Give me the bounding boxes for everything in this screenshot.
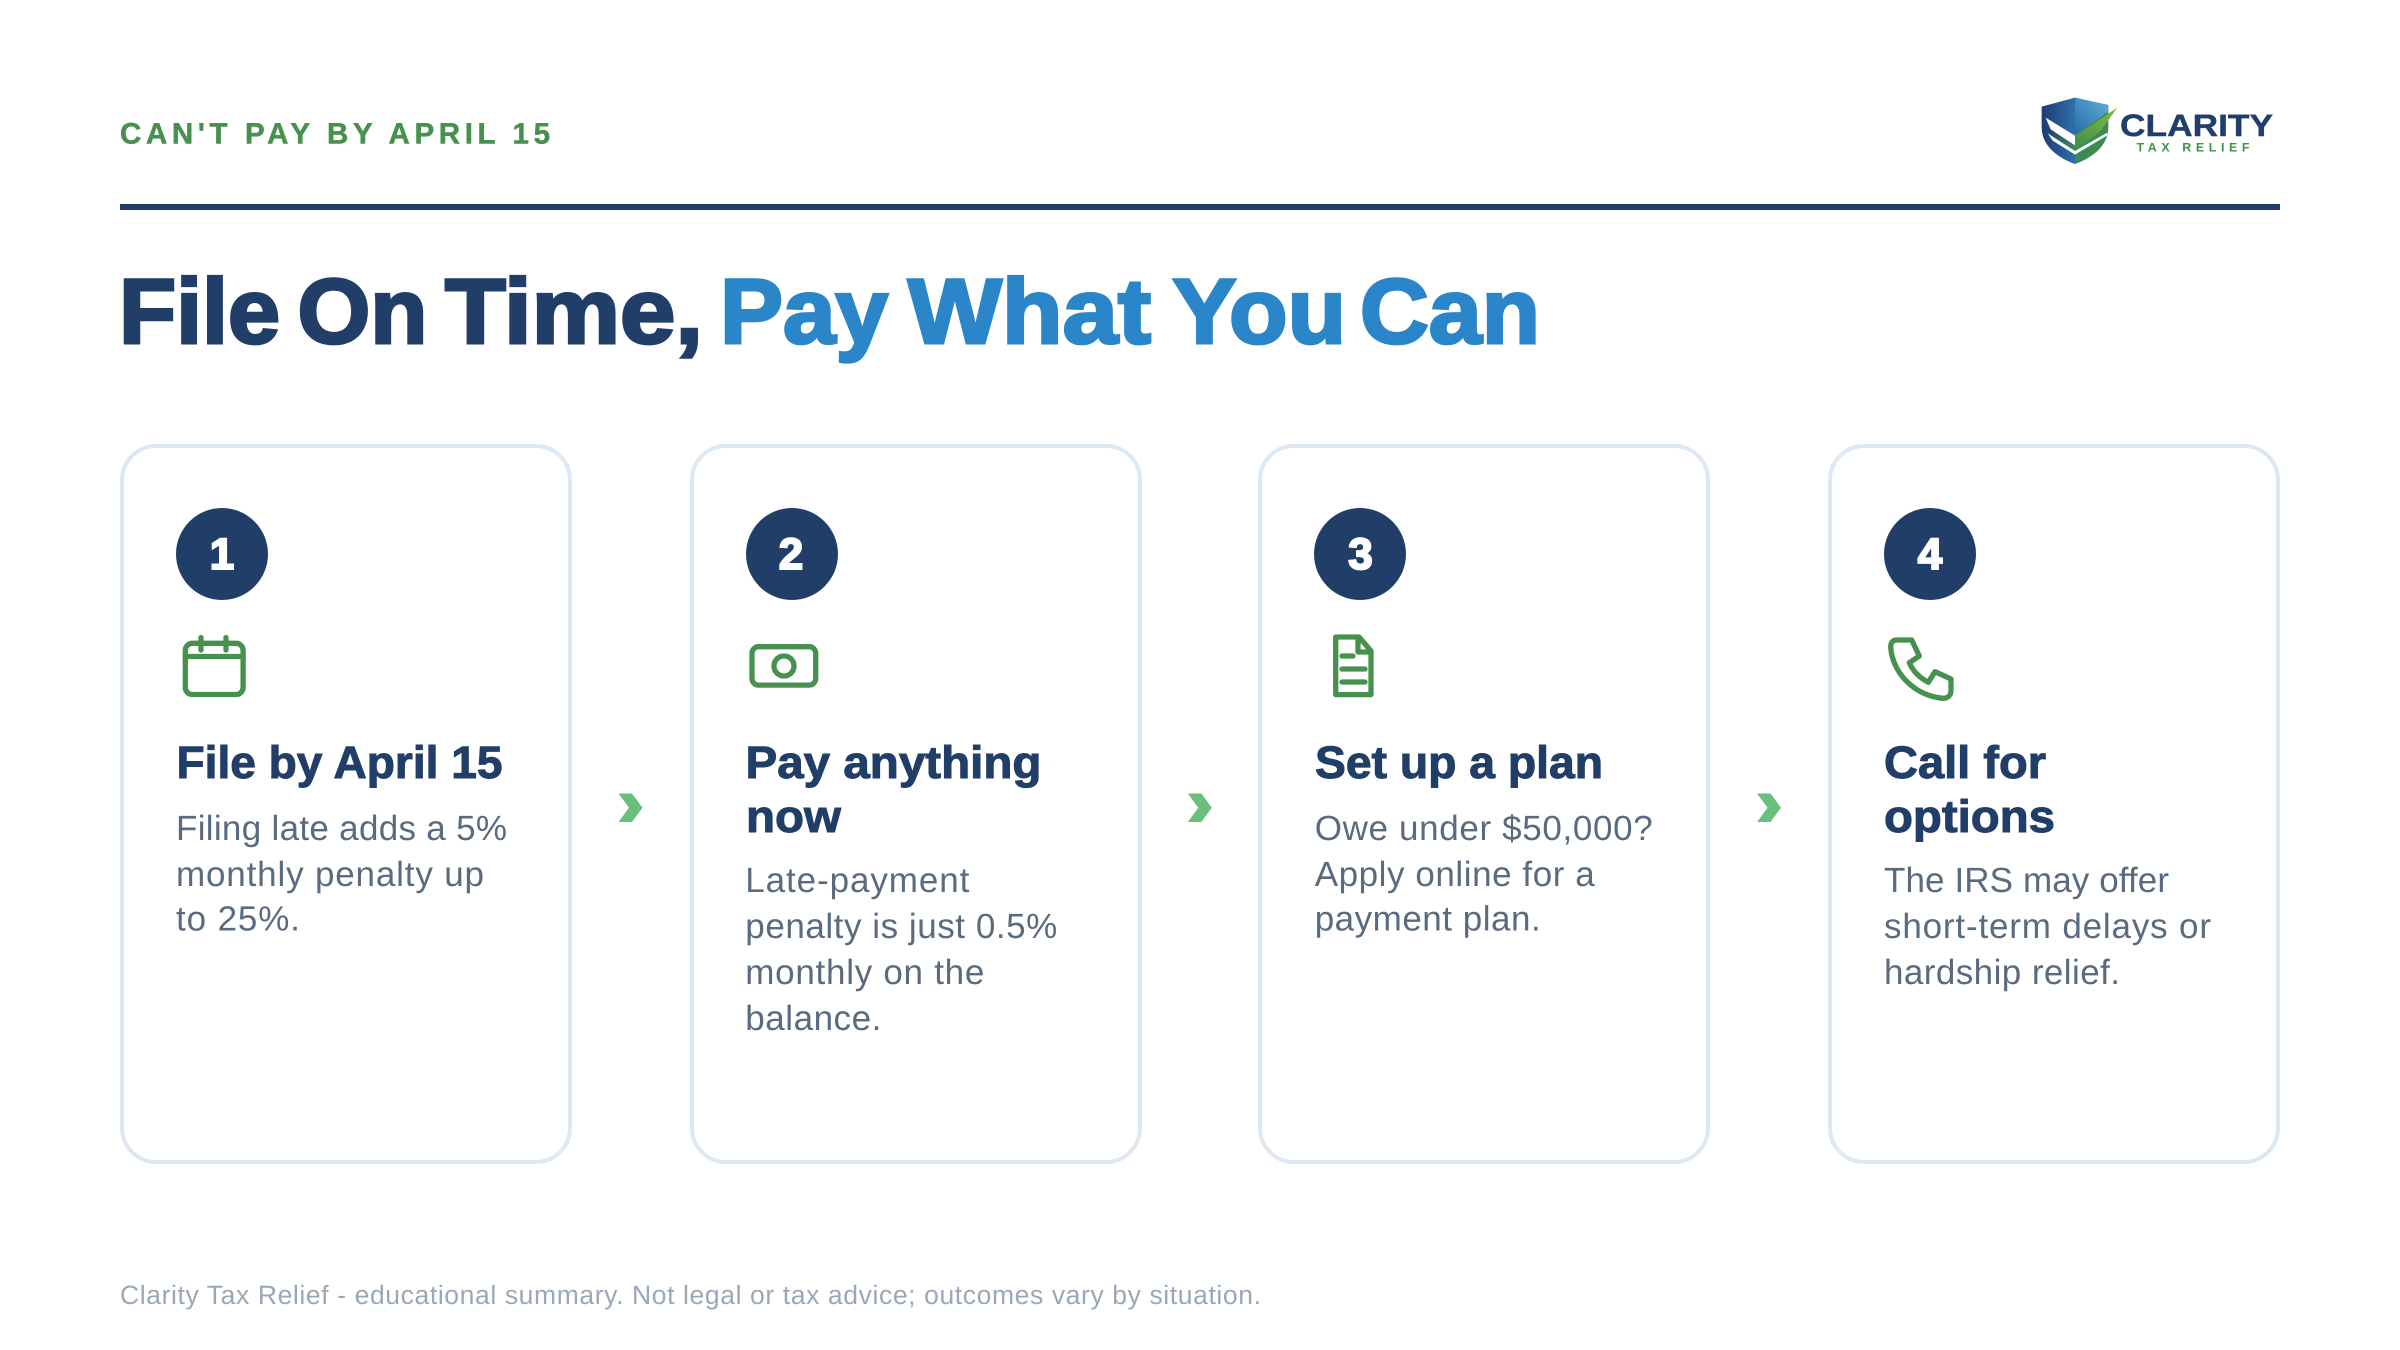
body text: Late-payment — [745, 861, 970, 900]
step number 3 — [1314, 508, 1406, 600]
icon: document — [1336, 637, 1371, 695]
card frame — [1260, 446, 1708, 1162]
logo: Clarity Tax Relief — [2042, 98, 2273, 164]
title: navy part: On — [298, 261, 428, 363]
body text: penalty is just 0.5% — [745, 907, 1057, 946]
heading: Set up a plan — [1315, 737, 1603, 788]
body text: to 25%. — [176, 900, 300, 938]
title: blue part: You — [1172, 261, 1346, 363]
card frame — [122, 446, 570, 1162]
icon: calendar — [185, 638, 243, 694]
title: navy part — [119, 261, 703, 363]
panel: step 4 — [1830, 446, 2278, 1162]
arrow 1 — [618, 794, 642, 822]
panel: step 1 — [122, 446, 570, 1162]
title — [119, 261, 1540, 363]
body text: balance. — [745, 999, 881, 1038]
step number 2: 2 — [779, 530, 803, 579]
panel: step 2 — [692, 446, 1140, 1162]
icon: banknote — [752, 647, 816, 685]
body text: payment plan. — [1315, 900, 1541, 938]
body text — [176, 809, 507, 938]
title: navy part: Time, — [445, 261, 703, 363]
step number 3: 3 — [1348, 530, 1373, 579]
title: blue part: Pay — [720, 261, 888, 363]
step number 2 — [746, 508, 838, 600]
body text — [1884, 861, 2211, 992]
body text: Apply online for a — [1315, 855, 1595, 894]
card frame — [1830, 446, 2278, 1162]
body text: Owe under $50,000? — [1315, 809, 1653, 848]
title: blue part: What — [908, 261, 1151, 363]
title: blue part — [720, 261, 1540, 363]
card frame — [692, 446, 1140, 1162]
panel: step 3 — [1260, 446, 1708, 1162]
body text: The IRS may offer — [1884, 861, 2169, 900]
step number 1 — [176, 508, 268, 600]
body text: hardship relief. — [1884, 953, 2120, 992]
icon: shield with check — [2042, 98, 2117, 164]
body text: monthly on the — [745, 953, 984, 992]
body text: Filing late adds a 5% — [176, 809, 507, 848]
heading: Pay anything — [746, 737, 1042, 788]
heading: Call for — [1884, 737, 2046, 788]
title: blue part: Can — [1360, 261, 1540, 363]
step number 4 — [1884, 508, 1976, 600]
heading — [1884, 737, 2055, 842]
arrow 2 — [1188, 794, 1212, 822]
logo wordmark: CLARITY — [2120, 108, 2273, 143]
icon: phone — [1891, 640, 1951, 698]
heading: options — [1884, 791, 2055, 842]
body text: monthly penalty up — [176, 855, 484, 894]
logo tagline: TAX RELIEF — [2136, 141, 2250, 155]
body text: short-term delays or — [1884, 907, 2211, 946]
header rule — [120, 204, 2280, 210]
eyebrow label: CAN'T PAY BY APRIL 15 — [120, 118, 550, 150]
step number 1: 1 — [210, 530, 234, 579]
heading: now — [746, 791, 842, 842]
step number 4: 4 — [1918, 530, 1943, 579]
footer disclaimer: Clarity Tax Relief - educational summary. Not legal or tax advice; outcomes vary by situation. — [120, 1280, 1261, 1310]
heading — [746, 737, 1042, 842]
body text — [1315, 809, 1653, 938]
arrow 3 — [1757, 794, 1781, 822]
heading: File by April 15 — [176, 737, 502, 788]
body text — [745, 861, 1057, 1038]
title: navy part: File — [119, 261, 280, 363]
